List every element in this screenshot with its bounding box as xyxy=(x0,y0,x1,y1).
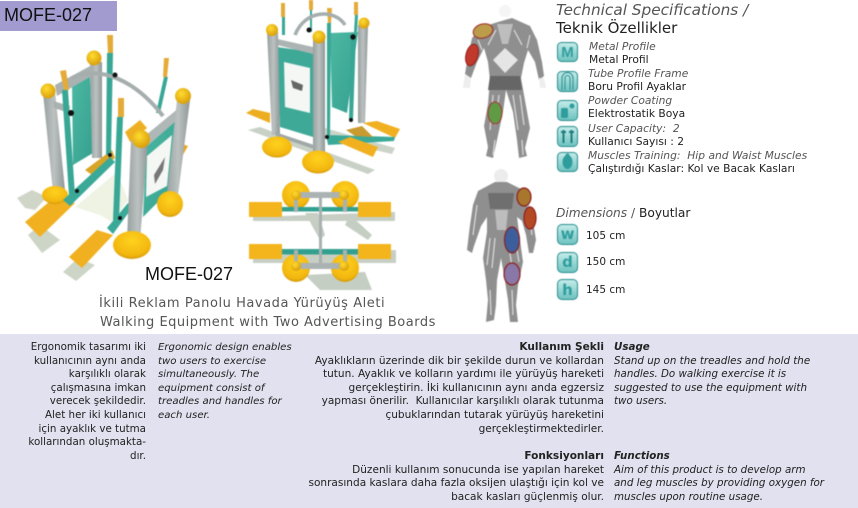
muscle figure: front view xyxy=(467,169,536,322)
dimension values: 150 cm xyxy=(586,256,625,268)
model label xyxy=(0,1,117,31)
Turkish functions xyxy=(308,450,604,503)
Turkish usage: tutun. Ayaklık ve kolların yardımı ile yürüyüş hareketi xyxy=(323,368,604,380)
arch handle xyxy=(72,73,163,116)
spec: tube frame: Boru Profil Ayaklar xyxy=(588,80,686,93)
dimension values: 105 cm xyxy=(586,230,625,242)
product title: Walking Equipment with Two Advertising Boards xyxy=(100,315,436,330)
panel: description xyxy=(0,334,858,508)
product title xyxy=(99,294,436,330)
English intro: Ergonomic design enables xyxy=(158,342,292,353)
equipment view: side xyxy=(246,0,400,174)
left post xyxy=(43,91,65,192)
icon: metal profile xyxy=(558,42,578,62)
spec: tube frame: Tube Profile Frame xyxy=(588,67,688,80)
Turkish functions: Fonksiyonları xyxy=(524,450,604,462)
equipment view: perspective xyxy=(17,35,191,281)
English functions: and leg muscles by providing oxygen for xyxy=(614,477,824,489)
Turkish usage: yapması önerilir. Kullanıcılar karşılıklı olarak tutunma xyxy=(322,395,604,407)
base dome xyxy=(42,186,68,204)
English usage: handles. Do walking exercise it is xyxy=(614,368,786,380)
spec: powder coating: Powder Coating xyxy=(588,94,672,107)
rear post xyxy=(90,62,102,158)
icon: width xyxy=(558,224,578,244)
Turkish intro: çalışmasına imkan xyxy=(51,382,146,394)
English functions: Functions xyxy=(614,450,670,462)
English intro: equipment consist of xyxy=(158,383,265,394)
Turkish intro: kollarından oluşmakta- xyxy=(28,436,146,448)
English functions: muscles upon routine usage. xyxy=(614,491,763,503)
spec: metal profile: Metal Profile xyxy=(589,40,656,53)
Turkish usage: Ayaklıkların üzerinde dik bir şekilde durun ve kollardan xyxy=(315,355,604,367)
icon: metal profile: M xyxy=(561,44,574,61)
spec: muscles training xyxy=(588,149,807,175)
Turkish intro: Ergonomik tasarımı iki xyxy=(31,341,146,353)
icon: width: w xyxy=(561,225,575,243)
posts xyxy=(267,32,280,135)
model label: MOFE-027 xyxy=(4,5,92,25)
technical specifications heading: Technical Specifications / xyxy=(556,1,748,19)
English intro: two users to exercise xyxy=(158,356,266,367)
Turkish functions: sonrasında kaslara daha fazla oksijen ulaştığı için kol ve xyxy=(308,477,604,489)
back board xyxy=(72,75,93,165)
teal frames xyxy=(62,90,75,196)
Turkish functions: Düzenli kullanım sonucunda ise yapılan hareket xyxy=(352,464,604,476)
Turkish intro xyxy=(28,341,146,462)
main panel xyxy=(277,47,313,137)
technical specifications heading: Teknik Özellikler xyxy=(556,19,677,37)
rear footplates xyxy=(246,109,270,123)
spec: muscles training: Çalıştırdığı Kaslar: Kol ve Bacak Kasları xyxy=(588,162,795,175)
footplates xyxy=(25,197,75,237)
Turkish intro: için ayaklık ve tutma xyxy=(39,423,146,435)
icon: height: h xyxy=(562,281,573,299)
spec: muscles training: Muscles Training: Hip and Waist Muscles xyxy=(588,149,807,162)
icon: depth: d xyxy=(562,253,573,271)
spec: user capacity: Kullanıcı Sayısı : 2 xyxy=(588,135,684,148)
English intro: each user. xyxy=(158,410,210,421)
Turkish usage: Kullanım Şekli xyxy=(519,341,604,353)
icon: height xyxy=(558,280,578,300)
Turkish intro: Alet her iki kullanıcı xyxy=(45,409,146,421)
product title: İkili Reklam Panolu Havada Yürüyüş Aleti xyxy=(99,296,385,311)
English usage: two users. xyxy=(614,395,667,407)
Turkish usage: gerçekleştirmektedirler. xyxy=(479,423,604,435)
dimensions heading: Dimensions / Boyutlar xyxy=(556,206,690,220)
English usage: Stand up on the treadles and hold the xyxy=(614,355,810,367)
muscle figure: back view xyxy=(463,5,546,158)
English functions xyxy=(614,450,824,503)
dimension values xyxy=(586,230,625,296)
Turkish functions: bacak kasları güçlenmiş olur. xyxy=(451,491,604,503)
icon: tube frame xyxy=(558,72,578,92)
spec: powder coating xyxy=(588,94,685,120)
icon: user capacity xyxy=(558,126,578,146)
spec: user capacity: User Capacity: 2 xyxy=(588,122,680,135)
English usage xyxy=(614,341,810,407)
spec: tube frame xyxy=(588,67,688,93)
English intro xyxy=(158,342,292,421)
Turkish intro: dır. xyxy=(130,450,146,462)
marked muscles xyxy=(517,188,531,206)
front footplates xyxy=(338,137,378,157)
front post xyxy=(127,140,148,240)
Turkish usage: çubuklarından tutarak yürüyüş hareketini xyxy=(385,409,604,421)
dimension values: 145 cm xyxy=(586,284,625,296)
rear panel xyxy=(330,32,358,113)
icon: powder coating xyxy=(558,100,578,120)
spec: metal profile xyxy=(589,40,656,66)
Turkish intro: kullanıcının aynı anda xyxy=(34,355,146,367)
spec: metal profile: Metal Profil xyxy=(589,53,649,66)
English intro: simultaneously. The xyxy=(158,369,259,380)
Turkish usage xyxy=(315,341,604,435)
Turkish usage: gerçekleştirin. İki kullanıcının aynı anda egzersiz xyxy=(349,382,604,394)
caps and domes xyxy=(266,24,278,36)
spec: powder coating: Elektrostatik Boya xyxy=(588,107,685,120)
icon: depth xyxy=(558,252,578,272)
English usage: Usage xyxy=(614,341,650,353)
model caption: MOFE-027 xyxy=(145,264,233,284)
marked muscles xyxy=(472,22,494,40)
right post xyxy=(166,100,190,203)
spec: user capacity xyxy=(588,122,684,148)
technical specifications heading xyxy=(556,1,750,37)
handles xyxy=(107,35,113,53)
joints xyxy=(112,72,118,78)
English usage: suggested to use the equipment with xyxy=(614,382,807,394)
right board xyxy=(143,112,180,217)
English intro: treadles and handles for xyxy=(158,396,282,407)
Turkish intro: verecek şekildedir. xyxy=(50,395,146,407)
English functions: Aim of this product is to develop arm xyxy=(614,464,806,476)
equipment illustrations xyxy=(17,0,579,323)
icon: muscles training xyxy=(558,152,578,172)
caps xyxy=(40,84,56,98)
equipment view: top xyxy=(249,181,396,290)
Turkish intro: karşılıklı olarak xyxy=(69,368,146,380)
